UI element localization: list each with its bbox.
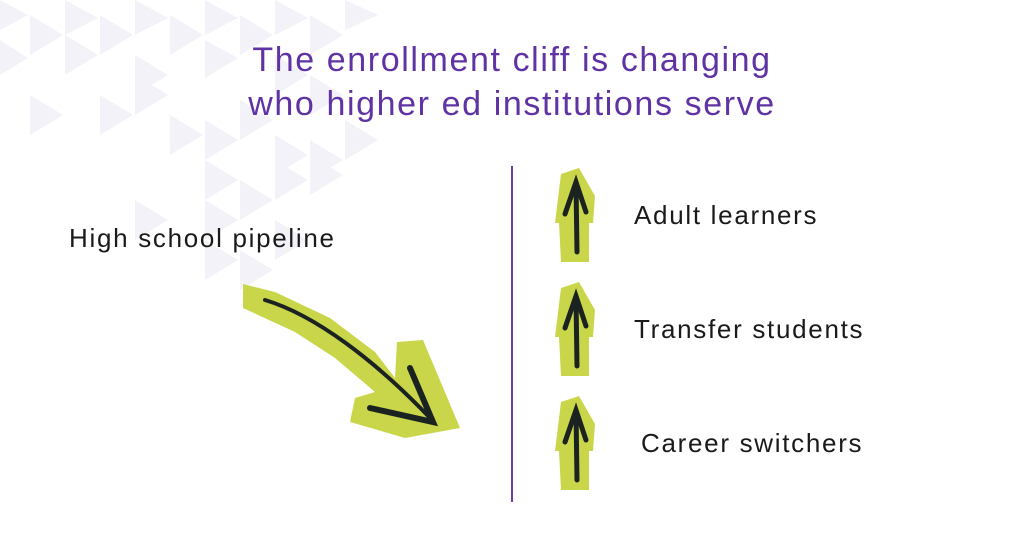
title: The enrollment cliff is changing [252,41,772,79]
label: high school pipeline: High school pipeline [69,223,336,253]
row: adult learners [555,168,818,262]
title: who higher ed institutions serve [248,85,776,123]
icon: up arrow [555,282,595,376]
icon: up arrow [555,168,595,262]
label: Adult learners [634,200,818,230]
divider line [511,166,513,502]
label: Career switchers [641,428,863,458]
arrow: down-right [243,284,460,438]
label: Transfer students [634,314,864,344]
icon: up arrow [555,396,595,490]
title [248,41,776,123]
background triangle pattern [0,0,378,290]
row: career switchers [555,396,863,490]
row: transfer students [555,282,864,376]
